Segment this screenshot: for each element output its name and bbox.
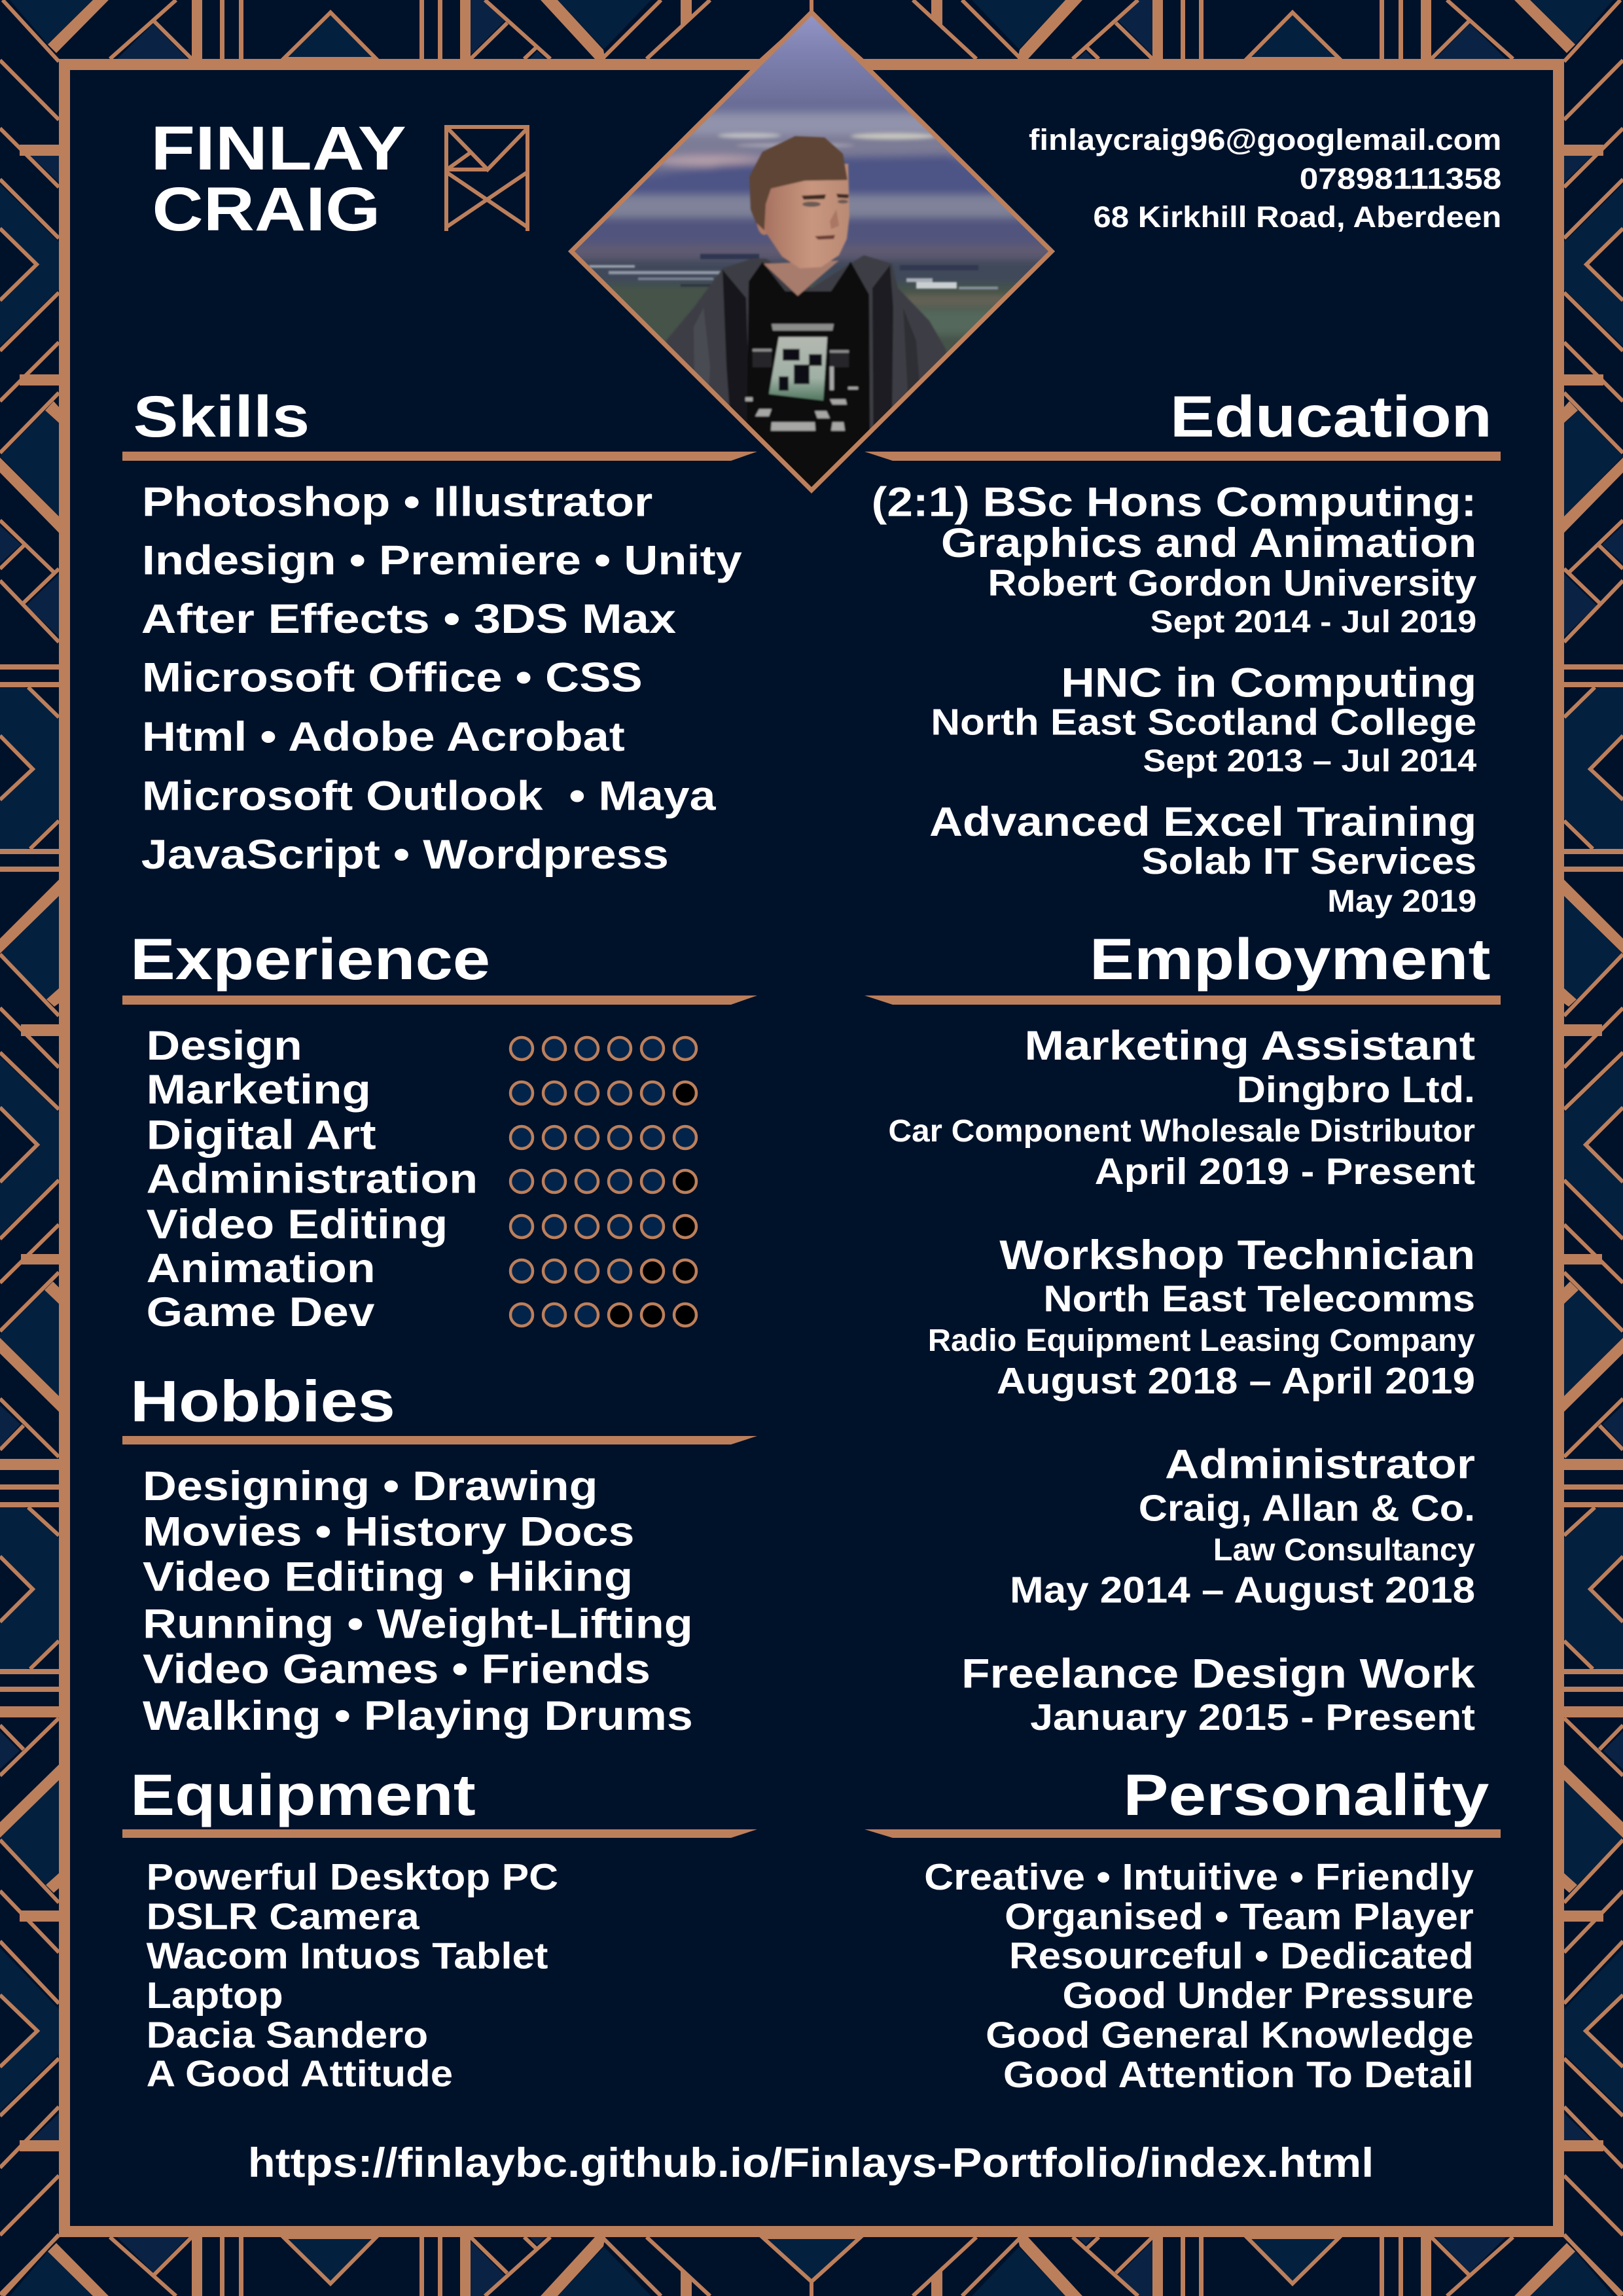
employment text: Workshop Technician <box>999 1232 1475 1278</box>
education text: Sept 2014 - Jul 2019 <box>1150 604 1476 639</box>
personality text: Resourceful • Dedicated <box>1009 1935 1474 1977</box>
experience text: Digital Art <box>147 1112 376 1158</box>
equipment text: Equipment <box>130 1762 476 1827</box>
employment text: Car Component Wholesale Distributor <box>888 1113 1475 1149</box>
education text: Solab IT Services <box>1141 840 1476 882</box>
panel: equipment <box>122 1762 757 2095</box>
education text: Graphics and Animation <box>941 520 1476 566</box>
skills heading rule <box>122 452 757 461</box>
skills text: Indesign • Premiere • Unity <box>142 538 742 584</box>
education heading rule <box>865 452 1501 461</box>
contact details: 68 Kirkhill Road, Aberdeen <box>1093 200 1501 234</box>
experience text: Animation <box>147 1246 376 1291</box>
equipment text <box>130 1762 558 2095</box>
employment text: April 2019 - Present <box>1095 1151 1475 1193</box>
skills text: Html • Adobe Acrobat <box>142 714 625 760</box>
panel: employment <box>865 926 1501 1738</box>
education text <box>872 384 1492 919</box>
employment text: January 2015 - Present <box>1030 1696 1475 1738</box>
hobbies text <box>130 1368 693 1739</box>
personality text <box>924 1762 1489 2096</box>
skills text: After Effects • 3DS Max <box>141 596 676 642</box>
education text: May 2019 <box>1327 884 1476 919</box>
panel: hobbies <box>122 1368 757 1739</box>
personality text: Good Attention To Detail <box>1003 2054 1474 2096</box>
panel: personality <box>865 1762 1501 2096</box>
name heading: CRAIG <box>152 175 380 244</box>
employment heading rule <box>865 996 1501 1005</box>
education text: Robert Gordon University <box>988 562 1477 604</box>
skills text: JavaScript • Wordpress <box>141 832 669 878</box>
employment text: North East Telecomms <box>1043 1278 1475 1320</box>
skills text: Photoshop • Illustrator <box>142 479 652 525</box>
panel: skills <box>122 384 757 878</box>
hobbies heading rule <box>122 1436 757 1444</box>
personality text: Personality <box>1123 1762 1489 1827</box>
contact details <box>1029 123 1501 234</box>
employment text <box>888 926 1491 1738</box>
personality text: Good General Knowledge <box>986 2014 1474 2056</box>
contact details: finlaycraig96@googlemail.com <box>1029 123 1501 156</box>
employment text: Law Consultancy <box>1213 1532 1475 1568</box>
equipment text: Wacom Intuos Tablet <box>147 1935 548 1977</box>
hobbies text: Movies • History Docs <box>143 1509 634 1554</box>
employment text: Administrator <box>1165 1442 1475 1488</box>
employment text: Marketing Assistant <box>1024 1023 1475 1069</box>
equipment text: Dacia Sandero <box>147 2014 428 2056</box>
experience text: Experience <box>130 926 490 992</box>
hobbies text: Walking • Playing Drums <box>143 1693 693 1739</box>
equipment text: DSLR Camera <box>147 1895 420 1937</box>
employment text: May 2014 – August 2018 <box>1010 1570 1475 1611</box>
contact details: 07898111358 <box>1300 162 1501 195</box>
experience heading rule <box>122 996 757 1005</box>
experience text: Game Dev <box>147 1289 375 1335</box>
employment text: August 2018 – April 2019 <box>997 1360 1475 1402</box>
hobbies text: Designing • Drawing <box>143 1463 597 1509</box>
experience text: Design <box>147 1023 302 1069</box>
portfolio URL footer: https://finlaybc.github.io/Finlays-Portfolio/index.html <box>248 2140 1374 2186</box>
skills text <box>133 384 742 878</box>
hobbies text: Video Games • Friends <box>143 1647 651 1693</box>
rating dots <box>510 1037 696 1326</box>
equipment text: A Good Attitude <box>147 2053 453 2095</box>
education text: Education <box>1170 384 1492 449</box>
personality text: Creative • Intuitive • Friendly <box>924 1856 1474 1898</box>
employment text: Craig, Allan & Co. <box>1139 1487 1475 1529</box>
panel: experience <box>122 926 757 1335</box>
personality heading rule <box>865 1829 1501 1838</box>
education text: Advanced Excel Training <box>929 799 1476 845</box>
personality text: Good Under Pressure <box>1062 1975 1474 2017</box>
hobbies text: Video Editing • Hiking <box>143 1554 633 1600</box>
panel: education <box>865 384 1501 919</box>
hobbies text: Hobbies <box>130 1368 395 1433</box>
employment text: Employment <box>1090 926 1491 992</box>
skills text: Microsoft Outlook • Maya <box>142 774 717 819</box>
skills text: Skills <box>133 384 310 449</box>
name heading <box>151 114 406 244</box>
experience text: Administration <box>147 1157 478 1202</box>
name heading: FINLAY <box>151 114 406 183</box>
employment text: Dingbro Ltd. <box>1237 1069 1475 1111</box>
hobbies text: Running • Weight-Lifting <box>143 1601 693 1647</box>
education text: (2:1) BSc Hons Computing: <box>872 479 1476 525</box>
equipment text: Laptop <box>147 1975 283 2017</box>
experience text: Video Editing <box>147 1202 448 1247</box>
equipment text: Powerful Desktop PC <box>147 1856 558 1898</box>
icon: geometric envelope <box>446 127 527 231</box>
skills text: Microsoft Office • CSS <box>142 655 643 701</box>
education text: HNC in Computing <box>1061 660 1476 706</box>
photo: portrait in diamond frame <box>563 0 1060 524</box>
education text: Sept 2013 – Jul 2014 <box>1143 743 1477 778</box>
equipment heading rule <box>122 1829 757 1838</box>
education text: North East Scotland College <box>931 702 1476 744</box>
experience text <box>130 926 490 1335</box>
employment text: Freelance Design Work <box>961 1651 1475 1696</box>
employment text: Radio Equipment Leasing Company <box>928 1323 1475 1358</box>
experience text: Marketing <box>147 1067 371 1113</box>
personality text: Organised • Team Player <box>1005 1895 1474 1937</box>
